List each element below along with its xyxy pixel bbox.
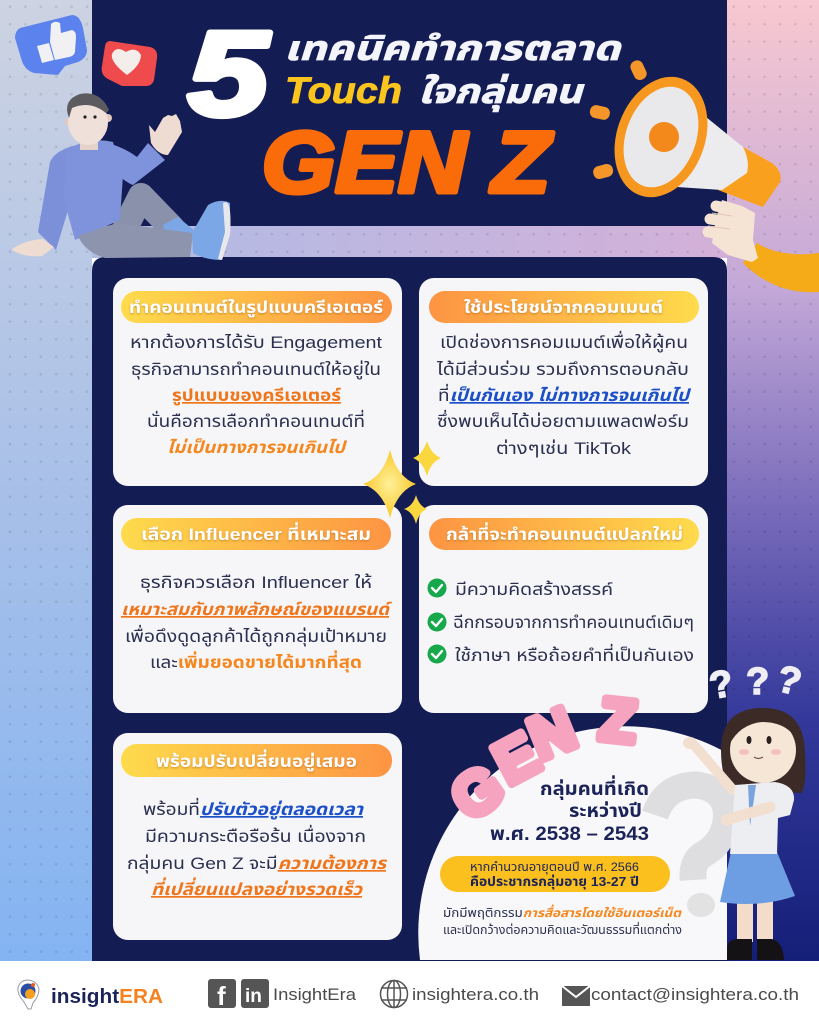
title line 1: เทคนิคทำการตลาด [284,30,622,68]
body text [130,332,382,457]
icon: thumbs up badge [15,15,87,75]
man shoe sole [218,202,230,260]
man bent leg [126,196,172,228]
question marks above girl: ? [706,662,736,708]
girl right shoe [757,939,784,960]
pink GEN Z letters: G [439,752,516,833]
body text: ไม่เป็นทางการจนเกินไป [167,438,347,457]
icon: linkedin: in [245,986,262,1007]
body text [127,797,387,899]
behaviour text: และเปิดกว้างต่อความคิดและวัฒนธรรมที่แตกต่าง [443,921,682,937]
age callout [440,856,670,892]
body text: ธุรกิจควรเลือก Influencer ให้ [140,572,372,593]
sparkle: large [363,450,416,518]
man raised arm [108,143,165,185]
girl right leg [757,900,773,942]
title GEN Z: GEN Z [262,115,554,211]
girl tie [748,785,756,826]
girl pointing arm [726,807,770,820]
girl shirt [730,782,794,854]
logo icon [18,980,39,1009]
man left arm [38,145,77,250]
gen z info text: กลุ่มคนที่เกิด [540,775,649,800]
sparkle: small [404,495,427,524]
pink GEN Z letters: N [520,694,585,773]
body text: รูปแบบของครีเอเตอร์ [172,386,341,406]
body text: กลุ่มคน Gen Z จะมี ความต้องการ [127,854,387,874]
body text: ที่เปลี่ยนแปลงอย่างรวดเร็ว [151,877,363,899]
question marks above girl: ? [773,658,806,704]
card: influencer [113,505,402,713]
sound spark bottom [592,163,614,180]
girl raised hand [683,737,697,749]
megaphone cone [677,117,748,190]
behaviour text [443,904,682,937]
logo wordmark: insightERA [51,986,163,1008]
man torso [64,140,123,240]
gen z info text [490,775,649,845]
body text: และเพิ่มยอดขายได้มากที่สุด [150,650,362,673]
body text: นั่นคือการเลือกทำคอนเทนต์ที่ [147,409,365,431]
title line 2 thai: ใจกลุ่มคน [418,73,584,112]
gen z info text: พ.ศ. 2538 – 2543 [490,824,649,845]
question marks above girl: ? [746,661,769,703]
check item 2: ฉีกกรอบจากการทำคอนเทนต์เดิมๆ [453,613,694,632]
sparkle: medium [413,441,441,476]
facebook handle: InsightEra [273,985,357,1004]
check item 1: มีความคิดสร้างสรรค์ [455,579,613,599]
icon: heart badge [102,41,157,86]
heading text: พร้อมปรับเปลี่ยนอยู่เสมอ [156,749,357,772]
man far shoe [163,217,196,238]
sound spark middle [589,104,611,121]
heading pill [429,518,699,550]
age callout: หากคำนวณอายุตอนปี พ.ศ. 2566 [470,860,639,874]
age callout: คือประชากรกลุ่มอายุ 13-27 ปี [470,874,639,889]
body text: ที่เป็นกันเอง ไม่ทางการจนเกินไป [438,383,691,405]
behaviour text: มักมีพฤติกรรม การสื่อสารโดยใช้อินเตอร์เน็ต [443,904,682,920]
icon: linkedin [241,979,269,1008]
body text: เปิดช่องการคอมเมนต์เพื่อให้ผู้คน [440,330,688,354]
girl left shoe [727,939,752,960]
illustration: girl [683,708,806,960]
icon: facebook [208,979,236,1011]
checklist [428,578,694,665]
man left hand [12,239,54,256]
title line 2 touch: Touch [285,70,402,111]
megaphone driver [649,122,679,152]
pink GEN Z letters [439,685,640,833]
pink GEN Z letters: Z [596,685,640,756]
hand [708,200,758,262]
question marks above girl [706,658,806,708]
megaphone handle [718,147,781,207]
sleeve [743,243,819,292]
sound spark top [628,58,649,82]
main content panel [92,257,727,961]
illustration: seated man [12,93,230,260]
body text: พร้อมที่ ปรับตัวอยู่ตลอดเวลา [143,797,365,820]
body text: ซึ่งพบเห็นได้บ่อยตามแพลตฟอร์ม [437,409,689,431]
icon: facebook: f [217,981,226,1011]
girl left leg [737,900,753,942]
man straight leg [78,223,193,258]
body text: หากต้องการได้รับ Engagement [130,332,382,352]
girl skirt [720,852,795,904]
heading pill [429,291,699,323]
megaphone inner [610,76,712,198]
icon: globe [380,980,408,1008]
website: insightera.co.th [412,985,539,1004]
icon: mail [562,986,590,1006]
check item 1 [428,578,613,599]
pink GEN Z letters: E [483,719,550,797]
title number 5: 5 [188,7,271,141]
check item 3: ใช้ภาษา หรือถ้อยคำที่เป็นกันเอง [455,643,694,665]
body text: เพื่อดึงดูดลูกค้าได้ถูกกลุ่มเป้าหมาย [125,624,387,648]
heading pill [121,744,392,777]
heading text: ใช้ประโยชน์จากคอมเมนต์ [464,298,663,317]
card: comments [419,278,708,486]
heading text: เลือก Influencer ที่เหมาะสม [141,522,371,544]
girl face [729,712,799,783]
girl back hair [721,708,806,793]
heading pill [121,518,391,550]
heading text: ทำคอนเทนต์ในรูปแบบครีเอเตอร์ [129,298,383,318]
man head [65,93,112,150]
card: adapt [113,733,402,940]
header panel [92,0,727,226]
email: contact@insightera.co.th [591,985,799,1004]
body text: เหมาะสมกับภาพลักษณ์ของแบรนด์ [121,600,392,619]
body text [436,330,691,458]
check item 3 [428,643,694,665]
illustration: megaphone with hand [589,58,819,292]
card: creator style [113,278,402,486]
heading pill [121,291,392,323]
man shoe [192,201,230,260]
body text [121,572,392,673]
gen z info text: ระหว่างปี [569,800,642,822]
title [188,7,622,211]
heading text: กล้าที่จะทำคอนเทนต์แปลกใหม่ [446,522,683,544]
big question mark [655,785,726,917]
body text: ต่างๆเช่น TikTok [496,439,632,458]
body text: มีความกระตือรือร้น เนื่องจาก [145,824,366,846]
body text: ธุรกิจสามารถทำคอนเทนต์ให้อยู่ใน [131,359,381,381]
megaphone bell [598,64,724,210]
gen z info circle [418,726,727,960]
footer [0,961,819,1024]
man hand [149,114,182,155]
card: new content [419,505,708,713]
body text: ได้มีส่วนร่วม รวมถึงการตอบกลับ [436,359,689,379]
girl raised arm [694,745,733,790]
